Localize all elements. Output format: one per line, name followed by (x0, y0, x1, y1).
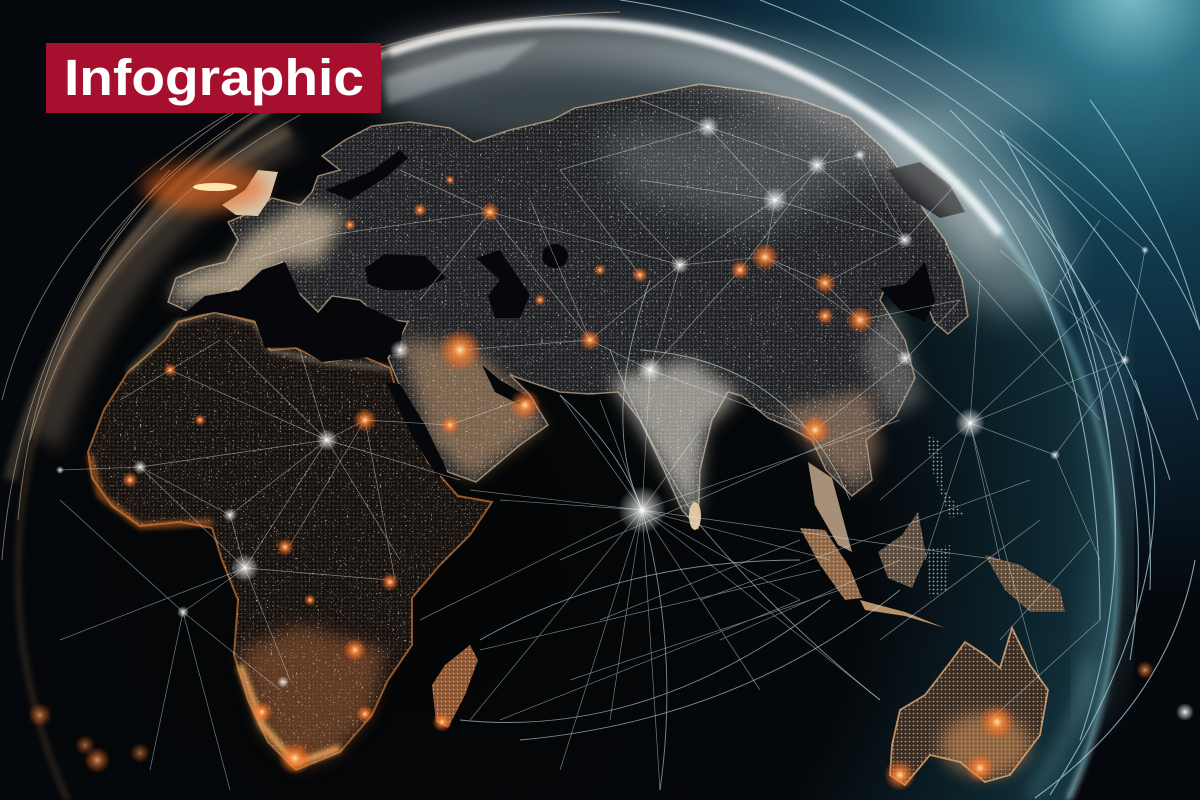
glow: southern Africa (240, 625, 385, 768)
bright land: SE Asia (780, 390, 880, 490)
bright land: Arabia (400, 340, 545, 480)
islands: Indonesia and Philippines (800, 435, 1065, 628)
sun flare over Britain (143, 163, 267, 211)
continent: United Kingdom (222, 170, 278, 216)
bright land: Asian coast (860, 300, 925, 420)
long arcs over the oceans (560, 395, 667, 790)
haze under the rim (380, 40, 1060, 160)
right orbit lines (620, 0, 1200, 798)
glow: southern coast (240, 665, 340, 764)
left rim band (10, 130, 290, 480)
network lines (60, 100, 1145, 790)
continent: Greenland edge (385, 40, 540, 105)
title text: Infographic (64, 49, 364, 106)
seas and dark cut-outs (178, 150, 965, 478)
continent: Madagascar (432, 645, 478, 728)
bright land: Europe (170, 205, 345, 300)
bright atmosphere (380, 42, 1000, 250)
continent: Australia (890, 628, 1048, 785)
right rim band (1085, 330, 1120, 720)
glow: west coast (90, 455, 212, 526)
white network hubs (56, 116, 1194, 721)
Malay peninsula (808, 462, 852, 552)
continent: Eurasia (168, 84, 968, 552)
haze on the left limb (30, 120, 300, 450)
haze on the upper right limb (839, 73, 1101, 347)
orange city lights (28, 175, 1154, 791)
upper bright arc (390, 23, 1000, 234)
city speckle on land (89, 84, 966, 769)
continent: Sri Lanka (689, 502, 701, 530)
title badge (46, 43, 381, 113)
left fine arcs (2, 12, 620, 560)
glow: Mediterranean coast (128, 312, 390, 372)
bright land: Siberia (600, 110, 880, 230)
bright land: India (610, 360, 740, 520)
lower right rim band (1030, 660, 1090, 798)
continent: Africa (88, 312, 492, 770)
